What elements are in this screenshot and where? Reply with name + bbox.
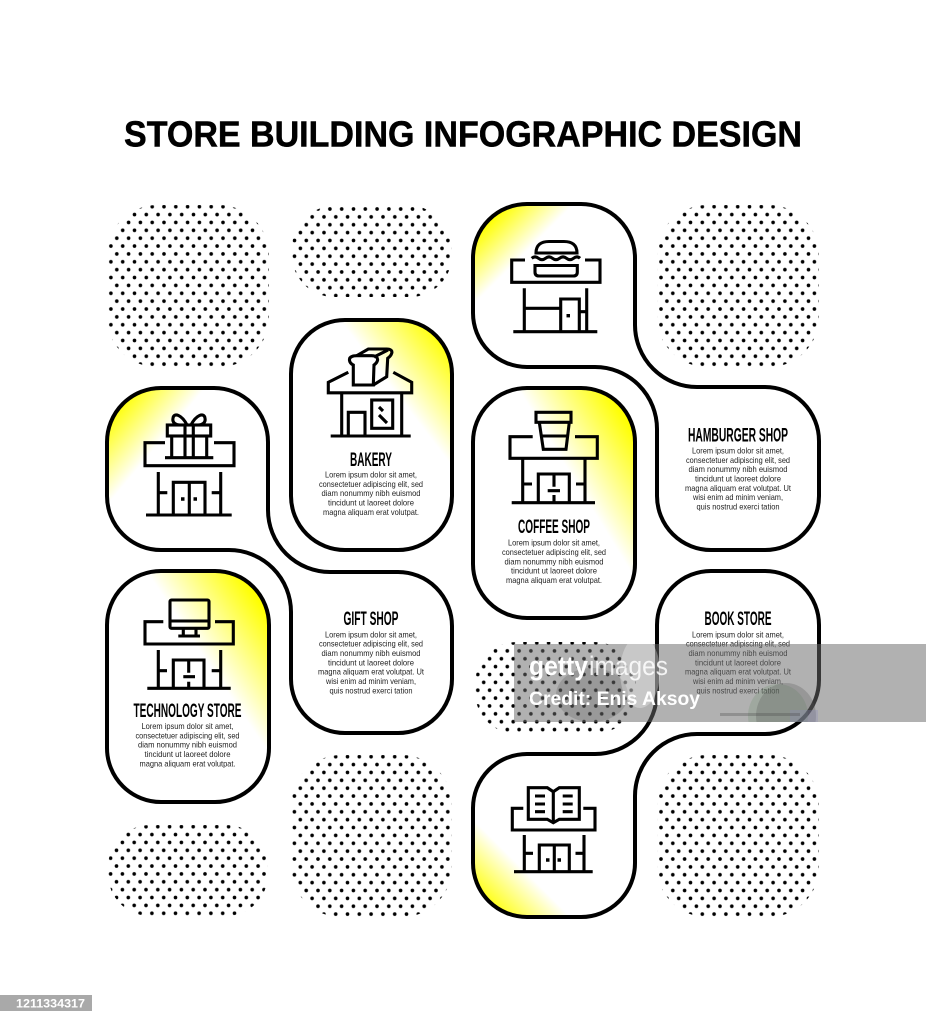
body text: gift shop: diam nonummy nibh euismod xyxy=(322,649,421,658)
body text: coffee shop: consectetuer adipiscing elit, sed xyxy=(502,548,606,557)
heading: gift shop: GIFT SHOP xyxy=(344,609,399,630)
body text: hamburger shop: Lorem ipsum dolor sit amet, xyxy=(692,446,784,456)
heading: book store: BOOK STORE xyxy=(704,609,772,630)
panel: hamburger shop xyxy=(473,204,819,550)
dot pattern panel: top centre xyxy=(292,206,452,297)
panel: book store xyxy=(473,571,819,917)
heading: hamburger shop: HAMBURGER SHOP xyxy=(688,426,788,447)
hamburger shop outline xyxy=(473,204,819,550)
technology store outline xyxy=(107,571,269,802)
body text: gift shop: consectetuer adipiscing elit, sed xyxy=(319,640,423,649)
bakery outline xyxy=(291,320,452,550)
icon: book store xyxy=(512,788,595,872)
watermark logo: getty: getty xyxy=(529,651,588,681)
panel: gift shop xyxy=(107,388,452,733)
body text: technology store: tincidunt ut laoreet dolore xyxy=(144,750,231,759)
panel: bakery xyxy=(291,320,452,550)
body text: technology store xyxy=(136,722,240,768)
body text: book store: quis nostrud exerci tation xyxy=(696,686,780,695)
body text: bakery: magna aliquam erat volutpat. xyxy=(323,508,419,517)
body text: technology store: Lorem ipsum dolor sit amet, xyxy=(142,722,234,731)
dot pattern panel: top left xyxy=(107,205,269,367)
body text: technology store: consectetuer adipiscing elit, sed xyxy=(136,731,240,740)
dot pattern panel: bottom left xyxy=(108,825,268,916)
body text: hamburger shop: quis nostrud exerci tation xyxy=(696,502,780,512)
dot pattern panel: bottom right xyxy=(657,755,819,917)
body text: gift shop: tincidunt ut laoreet dolore xyxy=(328,658,414,667)
title: STORE BUILDING INFOGRAPHIC DESIGN xyxy=(124,114,802,154)
gift shop outline xyxy=(107,388,452,733)
body text: hamburger shop: diam nonummy nibh euismod xyxy=(688,465,788,474)
image id tag: 1211334317 xyxy=(16,996,85,1010)
body text: book store: tincidunt ut laoreet dolore xyxy=(695,658,781,667)
icon: technology store xyxy=(145,600,233,688)
body text: gift shop: Lorem ipsum dolor sit amet, xyxy=(325,630,417,639)
body text: bakery: consectetuer adipiscing elit, sed xyxy=(319,480,423,489)
body text: hamburger shop: consectetuer adipiscing elit, sed xyxy=(686,456,790,465)
icon: hamburger shop xyxy=(512,242,600,332)
body text: bakery: tincidunt ut laoreet dolore xyxy=(328,498,414,508)
body text: book store: magna aliquam erat volutpat. Ut xyxy=(685,668,792,677)
body text: coffee shop: Lorem ipsum dolor sit amet, xyxy=(508,539,600,548)
watermark band xyxy=(514,644,926,722)
dot pattern panel: top right xyxy=(657,205,819,367)
body text: hamburger shop: wisi enim ad minim veniam, xyxy=(692,493,783,502)
body text: book store: Lorem ipsum dolor sit amet, xyxy=(692,630,784,639)
panel: technology store xyxy=(107,571,269,802)
body text: coffee shop: magna aliquam erat volutpat. xyxy=(506,576,602,585)
body text: technology store: magna aliquam erat volutpat. xyxy=(140,759,236,768)
dot pattern panel: middle xyxy=(475,642,636,734)
heading: technology store: TECHNOLOGY STORE xyxy=(134,701,242,722)
dot pattern panel: bottom centre xyxy=(291,755,452,917)
book store outline xyxy=(473,571,819,917)
body text: hamburger shop: tincidunt ut laoreet dolore xyxy=(695,474,781,484)
watermark credit text: Credit: Enis Aksoy xyxy=(529,689,700,710)
body text: gift shop xyxy=(318,630,425,695)
body text: book store: diam nonummy nibh euismod xyxy=(688,649,788,658)
heading: coffee shop: COFFEE SHOP xyxy=(518,517,590,538)
coffee shop outline xyxy=(473,388,635,618)
panel: coffee shop xyxy=(473,388,635,618)
body text: gift shop: wisi enim ad minim veniam, xyxy=(325,677,416,686)
body text: book store xyxy=(685,630,792,695)
body text: coffee shop: tincidunt ut laoreet dolore xyxy=(511,567,597,576)
body text: bakery: diam nonummy nibh euismod xyxy=(322,489,421,498)
body text: book store: wisi enim ad minim veniam, xyxy=(692,677,783,686)
body text: coffee shop: diam nonummy nibh euismod xyxy=(504,557,604,566)
body text: coffee shop xyxy=(502,539,606,585)
watermark logo: images: images xyxy=(589,651,668,681)
body text: hamburger shop xyxy=(685,446,792,512)
body text: bakery: Lorem ipsum dolor sit amet, xyxy=(325,470,417,480)
body text: technology store: diam nonummy nibh euismod xyxy=(138,741,237,750)
icon: coffee shop xyxy=(510,412,597,503)
body text: hamburger shop: magna aliquam erat volutpat. Ut xyxy=(685,484,792,493)
body text: book store: consectetuer adipiscing elit, sed xyxy=(686,640,790,649)
heading: bakery: BAKERY xyxy=(350,450,392,471)
icon: gift shop xyxy=(145,415,234,515)
image id tag xyxy=(0,995,92,1011)
body text: gift shop: quis nostrud exerci tation xyxy=(330,686,413,695)
icon: bakery xyxy=(328,349,412,436)
body text: bakery xyxy=(319,470,423,517)
body text: gift shop: magna aliquam erat volutpat. Ut xyxy=(318,668,425,677)
